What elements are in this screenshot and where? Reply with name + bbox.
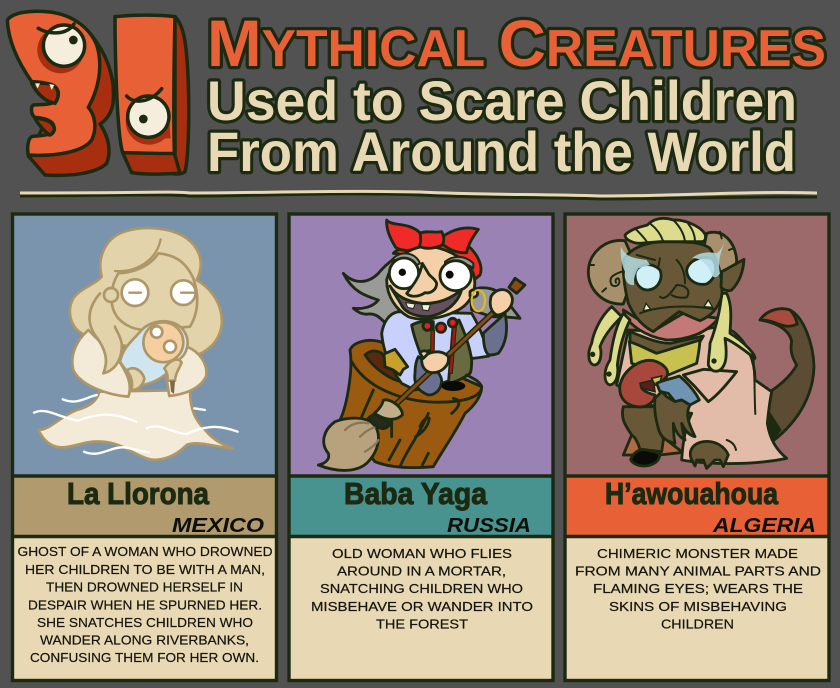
description: MISBEHAVE OR WANDER INTO [311, 599, 533, 614]
description: WANDER ALONG RIVERBANKS, [40, 632, 249, 648]
country: ALGERIA [712, 515, 816, 537]
description box [565, 537, 829, 680]
description: SKINS OF MISBEHAVING [609, 599, 787, 614]
character: H'awouahoua [588, 218, 814, 468]
name band [565, 476, 829, 536]
description: FROM MANY ANIMAL PARTS AND [575, 564, 821, 578]
description: HER CHILDREN TO BE WITH A MAN, [25, 562, 265, 577]
panel frame [565, 214, 829, 680]
description: SHE SNATCHES CHILDREN WHO [37, 615, 253, 630]
country: MEXICO [172, 515, 265, 537]
character: Baba Yaga [318, 220, 525, 470]
name band [12, 476, 276, 536]
numeral 3 [7, 11, 114, 175]
name: La Llorona [67, 476, 210, 511]
description [575, 546, 821, 632]
description: SNATCHING CHILDREN WHO [320, 581, 523, 596]
description: AROUND IN A MORTAR, [337, 564, 506, 578]
name: Baba Yaga [344, 476, 488, 511]
title line 1: MYTHICAL CREATURES [207, 6, 826, 80]
description: THEN DROWNED HERSELF IN [46, 580, 243, 594]
illustration background [12, 214, 276, 476]
illustration background [289, 214, 553, 476]
description: DESPAIR WHEN HE SPURNED HER. [28, 598, 262, 612]
title line 2: Used to Scare Children [207, 69, 797, 132]
title [207, 6, 826, 183]
big number 31 [7, 11, 189, 175]
illustration background [565, 214, 829, 476]
panel: La Llorona [12, 214, 276, 680]
panel frame [289, 214, 553, 680]
name band [289, 476, 553, 536]
character: La Llorona [34, 228, 238, 460]
description: CHILDREN [661, 616, 734, 632]
numeral 1 [115, 15, 189, 174]
title line 3: From Around the World [207, 120, 796, 183]
description: CONFUSING THEM FOR HER OWN. [30, 650, 259, 665]
description [18, 544, 272, 665]
country: RUSSIA [447, 515, 531, 537]
panel: H'awouahoua [565, 214, 829, 680]
description [311, 546, 533, 632]
description box [289, 537, 553, 680]
description: FLAMING EYES; WEARS THE [593, 581, 803, 596]
description: OLD WOMAN WHO FLIES [332, 546, 512, 561]
description: THE FOREST [376, 616, 468, 632]
description: CHIMERIC MONSTER MADE [597, 546, 798, 561]
description: GHOST OF A WOMAN WHO DROWNED [18, 544, 272, 559]
panel: Baba Yaga [289, 214, 553, 680]
description box [12, 537, 276, 680]
panel frame [12, 214, 276, 680]
name: H’awouahoua [605, 476, 779, 511]
